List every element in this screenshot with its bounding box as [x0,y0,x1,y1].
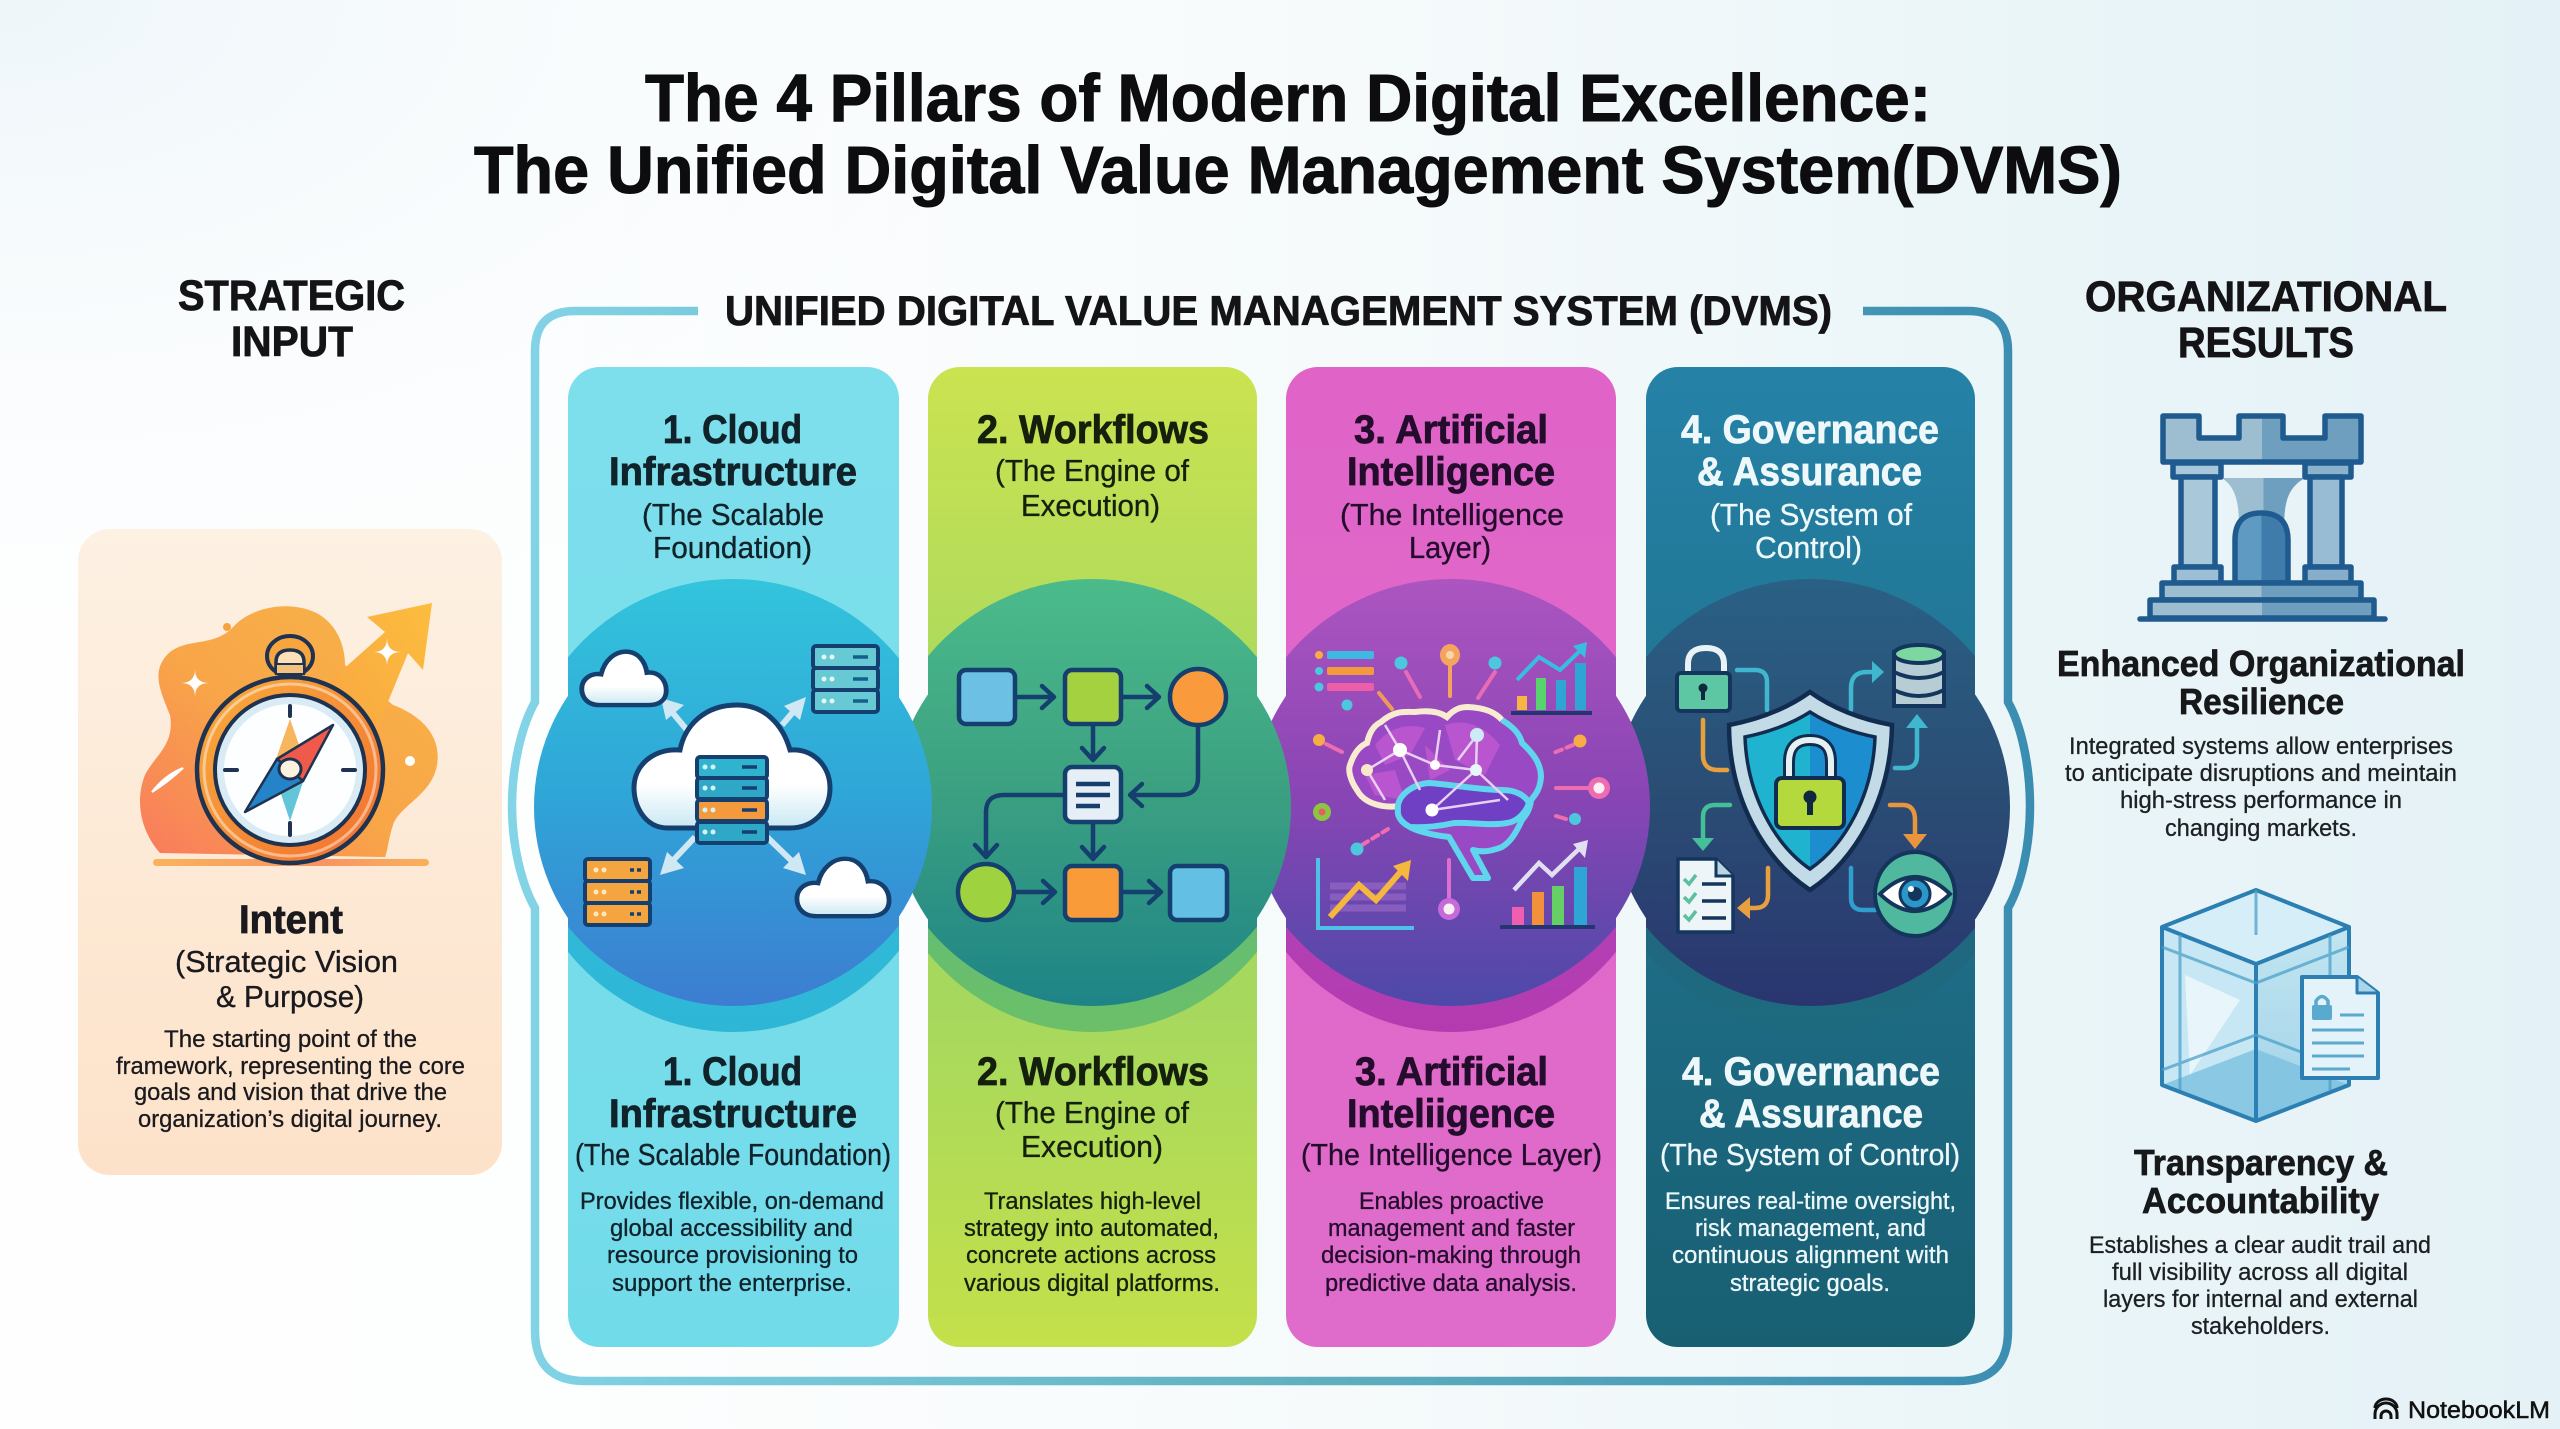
pillar 1 upper heading: Foundation) [653,530,812,565]
pillar 3 lower text [1301,1050,1602,1297]
bottom left server [585,859,650,925]
result 2 text: stakeholders. [2191,1313,2330,1340]
pillar 3 lower text: management and faster [1328,1215,1575,1242]
pillar 2 lower text: Translates high-level [984,1188,1201,1215]
pillar 2: workflows [912,367,1291,1347]
pillar 4 lower text: Ensures real-time oversight, [1665,1188,1956,1215]
pillar 3 lower text: (The Intelligence Layer) [1301,1137,1602,1172]
pillar 3 lower text: 3. Artificial [1355,1050,1548,1094]
pillar 3 circle [1272,579,1650,1032]
heading: organizational results: RESULTS [2178,319,2354,367]
heading: strategic input: INPUT [231,318,353,366]
top right server [813,646,878,712]
heading: organizational results [2085,273,2447,367]
pillar 4 lower text [1660,1050,1960,1297]
neural nodes [1326,665,1588,898]
pillar 4 lower text: strategic goals. [1730,1270,1890,1297]
chart bottom right [1500,840,1595,929]
pillar 3 upper heading: Intelligence [1347,450,1555,494]
pillar 3 lower text: predictive data analysis. [1325,1270,1577,1297]
icon: fortress [2140,416,2385,619]
pillar 1 lower text: Provides flexible, on-demand [580,1188,884,1215]
intent text: (Strategic Vision [175,944,398,979]
intent text: Intent [239,898,343,942]
pillar 4 upper heading: 4. Governance [1681,408,1939,452]
title [474,61,2122,208]
title: The 4 Pillars of Modern Digital Excellence: [645,61,1931,136]
pillar 4 lower text: & Assurance [1699,1092,1923,1136]
DVMS frame [512,311,2030,1381]
pillar 1 upper heading [609,408,857,565]
heading: strategic input [178,272,405,366]
pillar 1 lower text: Infrastructure [609,1092,857,1136]
intent text: organization’s digital journey. [138,1106,442,1133]
pillar 1 lower text: global accessibility and [610,1215,853,1242]
small padlock [1677,648,1730,711]
result 1 text: changing markets. [2165,815,2357,842]
icon: shield and connected security items [1677,645,1955,936]
pillar 2 upper heading [977,408,1209,523]
pillar 2 lower text: Execution) [1021,1129,1163,1164]
result 1 text: high-stress performance in [2120,787,2402,814]
pillar 3 lower text: decision-making through [1321,1242,1581,1269]
heading: DVMS system: UNIFIED DIGITAL VALUE MANAGEMENT SYSTEM (DVMS) [725,287,1832,334]
pillar 4 lower text: 4. Governance [1682,1050,1940,1094]
pillar 2 lower text: various digital platforms. [964,1270,1220,1297]
database [1894,645,1944,706]
pillar 4 upper heading [1681,408,1939,565]
result 2 text: full visibility across all digital [2112,1259,2408,1286]
pillar 3 upper heading [1340,408,1564,565]
NotebookLM logo: NotebookLM [2408,1397,2550,1424]
eye [1875,852,1955,936]
pillar 2 upper heading: (The Engine of [995,453,1189,488]
pillar 2 upper heading: 2. Workflows [977,408,1209,452]
pillar 1 upper heading: (The Scalable [642,497,824,532]
result 2 text: Establishes a clear audit trail and [2089,1232,2431,1259]
result 2 text: Accountability [2142,1180,2379,1221]
result 1 text: to anticipate disruptions and meintain [2065,760,2457,787]
pillar 3 upper heading: Layer) [1409,530,1491,565]
icon: compass with arrow [140,603,438,866]
pillar 2 lower text [964,1050,1220,1297]
result 2 text: layers for internal and external [2103,1286,2418,1313]
pillar 4 circle [1631,579,2010,1006]
pillar 4 upper heading: & Assurance [1697,450,1922,494]
brain [1349,707,1541,878]
result 2 text: Transparency & [2134,1142,2388,1183]
icon: cloud with servers [582,646,889,925]
pillar 3 lower text: Inteliigence [1347,1092,1555,1136]
pillar 1: cloud infrastructure [517,367,949,1347]
pillar 1 lower text: (The Scalable Foundation) [575,1137,891,1172]
pillar 1 lower text [575,1050,891,1297]
shield [1729,692,1892,890]
heading: strategic input: STRATEGIC [178,272,405,320]
distribution arrows [666,704,800,868]
result 1 text: Integrated systems allow enterprises [2069,733,2453,760]
pillar 4: governance and assurance [1631,367,2010,1347]
pillar 4 upper heading: (The System of [1710,497,1912,532]
pillar 2 lower text: (The Engine of [995,1095,1189,1130]
bars list [1314,651,1374,692]
intent text: & Purpose) [216,979,364,1014]
pillar 3: artificial intelligence [1272,367,1650,1347]
pillar 3 upper heading: (The Intelligence [1340,497,1564,532]
pillar 4 lower text: continuous alignment with [1672,1242,1949,1269]
result 1 text: Resilience [2179,681,2344,722]
pillar 2 lower text: concrete actions across [966,1242,1216,1269]
pillar 1 circle [517,579,949,1032]
title: The Unified Digital Value Management System(DVMS) [474,133,2122,208]
pillar 1 upper heading: 1. Cloud [663,408,802,452]
pillar 2 upper heading: Execution) [1021,488,1160,523]
small clouds [582,652,889,916]
pillar 4 upper heading: Control) [1755,530,1862,565]
pillar 4 lower text: risk management, and [1695,1215,1926,1242]
central cloud [634,705,830,828]
central server stack [697,757,767,843]
result 1 text [2057,643,2465,842]
chart bottom left [1318,858,1414,928]
intent text: goals and vision that drive the [134,1079,447,1106]
result 1 text: Enhanced Organizational [2057,643,2465,684]
heading: organizational results: ORGANIZATIONAL [2085,273,2447,321]
pillar 2 lower text: strategy into automated, [964,1215,1219,1242]
result 2 text [2089,1142,2431,1340]
checklist document [1678,859,1733,932]
pillar 2 circle [912,579,1291,1032]
pillar 3 lower text: Enables proactive [1359,1188,1544,1215]
pillar 3 upper heading: 3. Artificial [1354,408,1548,452]
pillar 1 lower text: 1. Cloud [663,1050,802,1094]
icon: workflow diagram [958,669,1227,920]
icon: brain with data charts [1313,642,1610,929]
pillar 1 upper heading: Infrastructure [609,450,857,494]
pillar 4 lower text: (The System of Control) [1660,1137,1960,1172]
chart top right [1511,642,1592,715]
pillar 1 lower text: support the enterprise. [612,1270,852,1297]
intent text: framework, representing the core [116,1053,465,1080]
intent text: The starting point of the [164,1026,417,1053]
icon: glass cube with document [2162,890,2378,1121]
pillar 2 lower text: 2. Workflows [977,1050,1209,1094]
panel: intent [78,529,502,1175]
pillar 1 lower text: resource provisioning to [607,1242,858,1269]
intent text [116,898,465,1133]
